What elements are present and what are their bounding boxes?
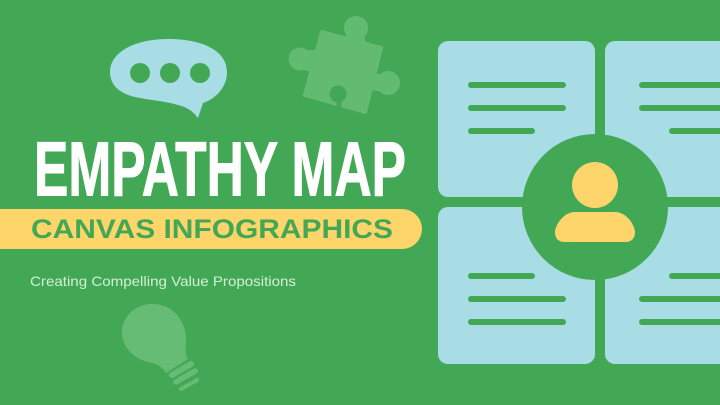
icon: speech bubble (110, 39, 227, 118)
subtitle banner (0, 209, 422, 249)
panel: bottom right (605, 207, 720, 364)
banner text: CANVAS INFOGRAPHICS (31, 214, 393, 244)
icon: light bulb (122, 304, 197, 389)
empathy map diagram (438, 41, 720, 364)
panel: top right (605, 41, 720, 197)
panel: bottom left (438, 207, 595, 364)
center circle (522, 134, 668, 280)
icon: user (555, 162, 635, 242)
title: EMPATHY MAP (34, 126, 406, 212)
tagline: Creating Compelling Value Propositions (30, 273, 296, 289)
icon: puzzle piece (288, 16, 400, 112)
panel: top left (438, 41, 595, 197)
